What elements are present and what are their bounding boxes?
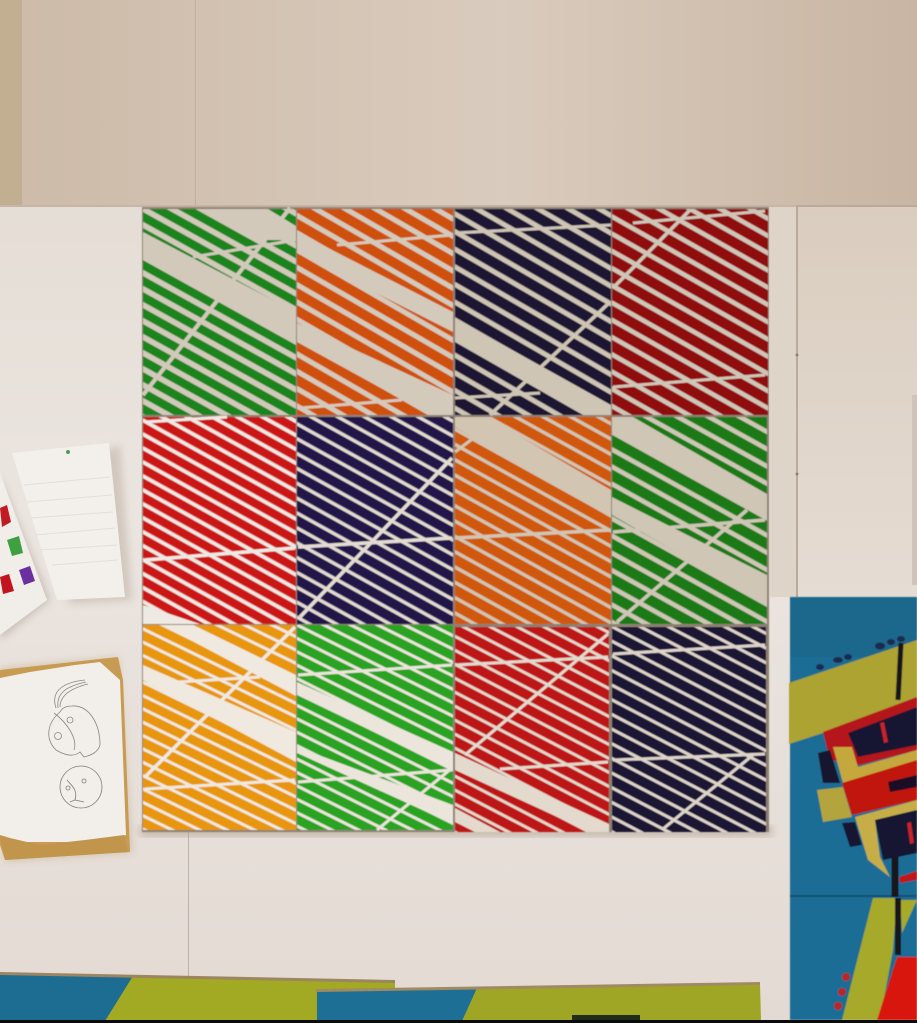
colour swatch sheet bbox=[0, 473, 50, 640]
panel: green canvas, row 2 column 4 bbox=[612, 417, 767, 624]
panel: navy canvas, row 1 column 3 bbox=[455, 209, 611, 415]
pinned lined paper bbox=[12, 443, 132, 604]
black bottom edge bbox=[0, 1020, 917, 1023]
panel: red canvas, row 3 column 3 bbox=[455, 627, 609, 832]
canvas grid bbox=[142, 207, 769, 832]
panel: orange canvas, row 1 column 2 bbox=[297, 209, 453, 415]
panel: yellow canvas, row 3 column 1 bbox=[143, 625, 296, 830]
panel: dark red canvas, row 1 column 4 bbox=[612, 209, 768, 415]
panel: red canvas, row 2 column 1 bbox=[143, 417, 296, 624]
bottom board painting, front bbox=[316, 982, 761, 1021]
panel: green canvas, row 3 column 2 bbox=[297, 625, 453, 830]
icon: upper face drawing bbox=[49, 680, 100, 757]
wall door panel bbox=[796, 205, 917, 597]
panel: navy canvas, row 3 column 4 bbox=[612, 627, 766, 832]
sketch paper with two faces bbox=[0, 657, 132, 861]
board painting on the right bbox=[789, 597, 917, 1020]
panel: orange canvas, row 2 column 3 bbox=[455, 417, 611, 624]
icon: lower face drawing bbox=[60, 766, 102, 808]
bottom board painting, back bbox=[0, 972, 395, 1021]
shadow beneath canvases bbox=[140, 826, 772, 836]
panel: green canvas, row 1 column 1 bbox=[143, 208, 296, 415]
panel: navy canvas, row 2 column 2 bbox=[297, 417, 453, 624]
